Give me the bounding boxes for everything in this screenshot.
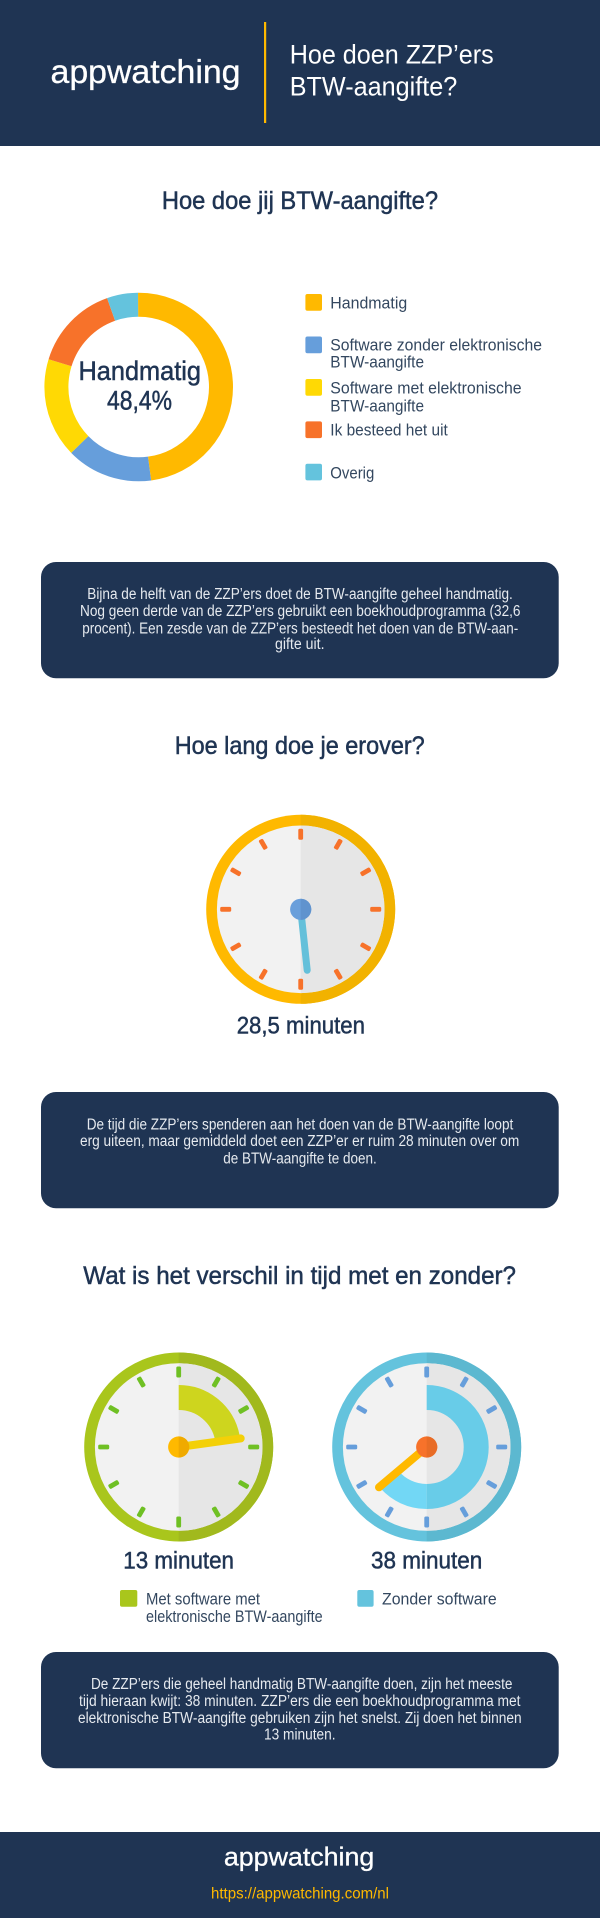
title: Hoe doen ZZP’ers [290,39,494,69]
panel: handmatig text: procent). Een zesde van de ZZP’ers besteedt het doen van de BTW-aan- [82,620,518,637]
legend: zonder software: Zonder software [382,1590,497,1608]
legend item: Overig: Overig [330,464,374,482]
panel: verschil text: De ZZP’ers die geheel handmatig BTW-aangifte doen, zijn het meeste [91,1676,512,1693]
panel: verschil text: elektronische BTW-aangifte gebruiken zijn het snelst. Zij doen het binnen [78,1710,522,1727]
label: 38 minuten: 38 minuten [371,1547,482,1574]
footer logo: appwatching: appwatching [224,1842,374,1872]
legend: met software [120,1590,323,1626]
heading: Hoe lang doe je erover?: Hoe lang doe je erover? [175,732,425,760]
panel: tijd text [41,1092,559,1208]
panel: tijd text: De tijd die ZZP’ers spenderen aan het doen van de BTW-aangifte loopt [87,1116,514,1133]
donut centre label: Handmatig [78,356,201,386]
title: BTW-aangifte? [290,72,457,102]
legend item: Software met elektronische BTW-aangifte [305,379,522,416]
heading: Hoe doe jij BTW-aangifte?: Hoe doe jij BTW-aangifte? [162,187,438,215]
footer url: https://appwatching.com/nl [211,1885,389,1902]
label: 13 minuten: 13 minuten [123,1547,234,1574]
legend item: Software zonder elektronische BTW-aangifte [305,336,542,372]
legend item: Software zonder elektronische BTW-aangifte: Software zonder elektronische [330,337,542,355]
panel: tijd text: erg uiteen, maar gemiddeld doet een ZZP’er er ruim 28 minuten over om [80,1133,519,1150]
title [290,39,494,102]
legend item: Handmatig: Handmatig [330,294,407,312]
panel: handmatig text: Nog geen derde van de ZZP’ers gebruikt een boekhoudprogramma (32,6 [80,603,520,620]
footer banner [0,1832,600,1918]
legend: met software: elektronische BTW-aangifte [146,1608,323,1626]
icon: clock 13 minuten [84,1352,273,1542]
label: 28,5 minuten: 28,5 minuten [237,1012,365,1039]
panel: verschil text [41,1652,559,1768]
panel: tijd text: de BTW-aangifte te doen. [223,1150,377,1167]
heading: Wat is het verschil in tijd met en zonder?: Wat is het verschil in tijd met en zonder? [83,1262,516,1290]
icon: clock 38 minuten [332,1352,521,1542]
donut legend [305,294,542,482]
donut centre label: 48,4% [107,385,172,415]
logo: appwatching: appwatching [50,53,240,90]
legend item: Software zonder elektronische BTW-aangifte: BTW-aangifte [330,354,424,372]
panel: handmatig text: gifte uit. [275,636,324,653]
legend item: Software met elektronische BTW-aangifte: Software met elektronische [330,379,522,397]
donut centre label [78,356,201,415]
legend item: Software met elektronische BTW-aangifte: BTW-aangifte [330,398,424,416]
legend item: Ik besteed het uit: Ik besteed het uit [330,422,448,440]
donut chart [56,305,221,469]
panel: verschil text: 13 minuten. [264,1726,336,1743]
icon: clock 28,5 minuten [206,815,395,1004]
legend: met software: Met software met [146,1590,260,1608]
panel: handmatig text [41,562,559,678]
header banner [0,0,600,146]
panel: verschil text: tijd hieraan kwijt: 38 minuten. ZZP’ers die een boekhoudprogramma met [79,1693,521,1710]
legend item: Overig [305,464,374,482]
panel: handmatig text: Bijna de helft van de ZZP’ers doet de BTW-aangifte geheel handmatig. [87,586,513,603]
